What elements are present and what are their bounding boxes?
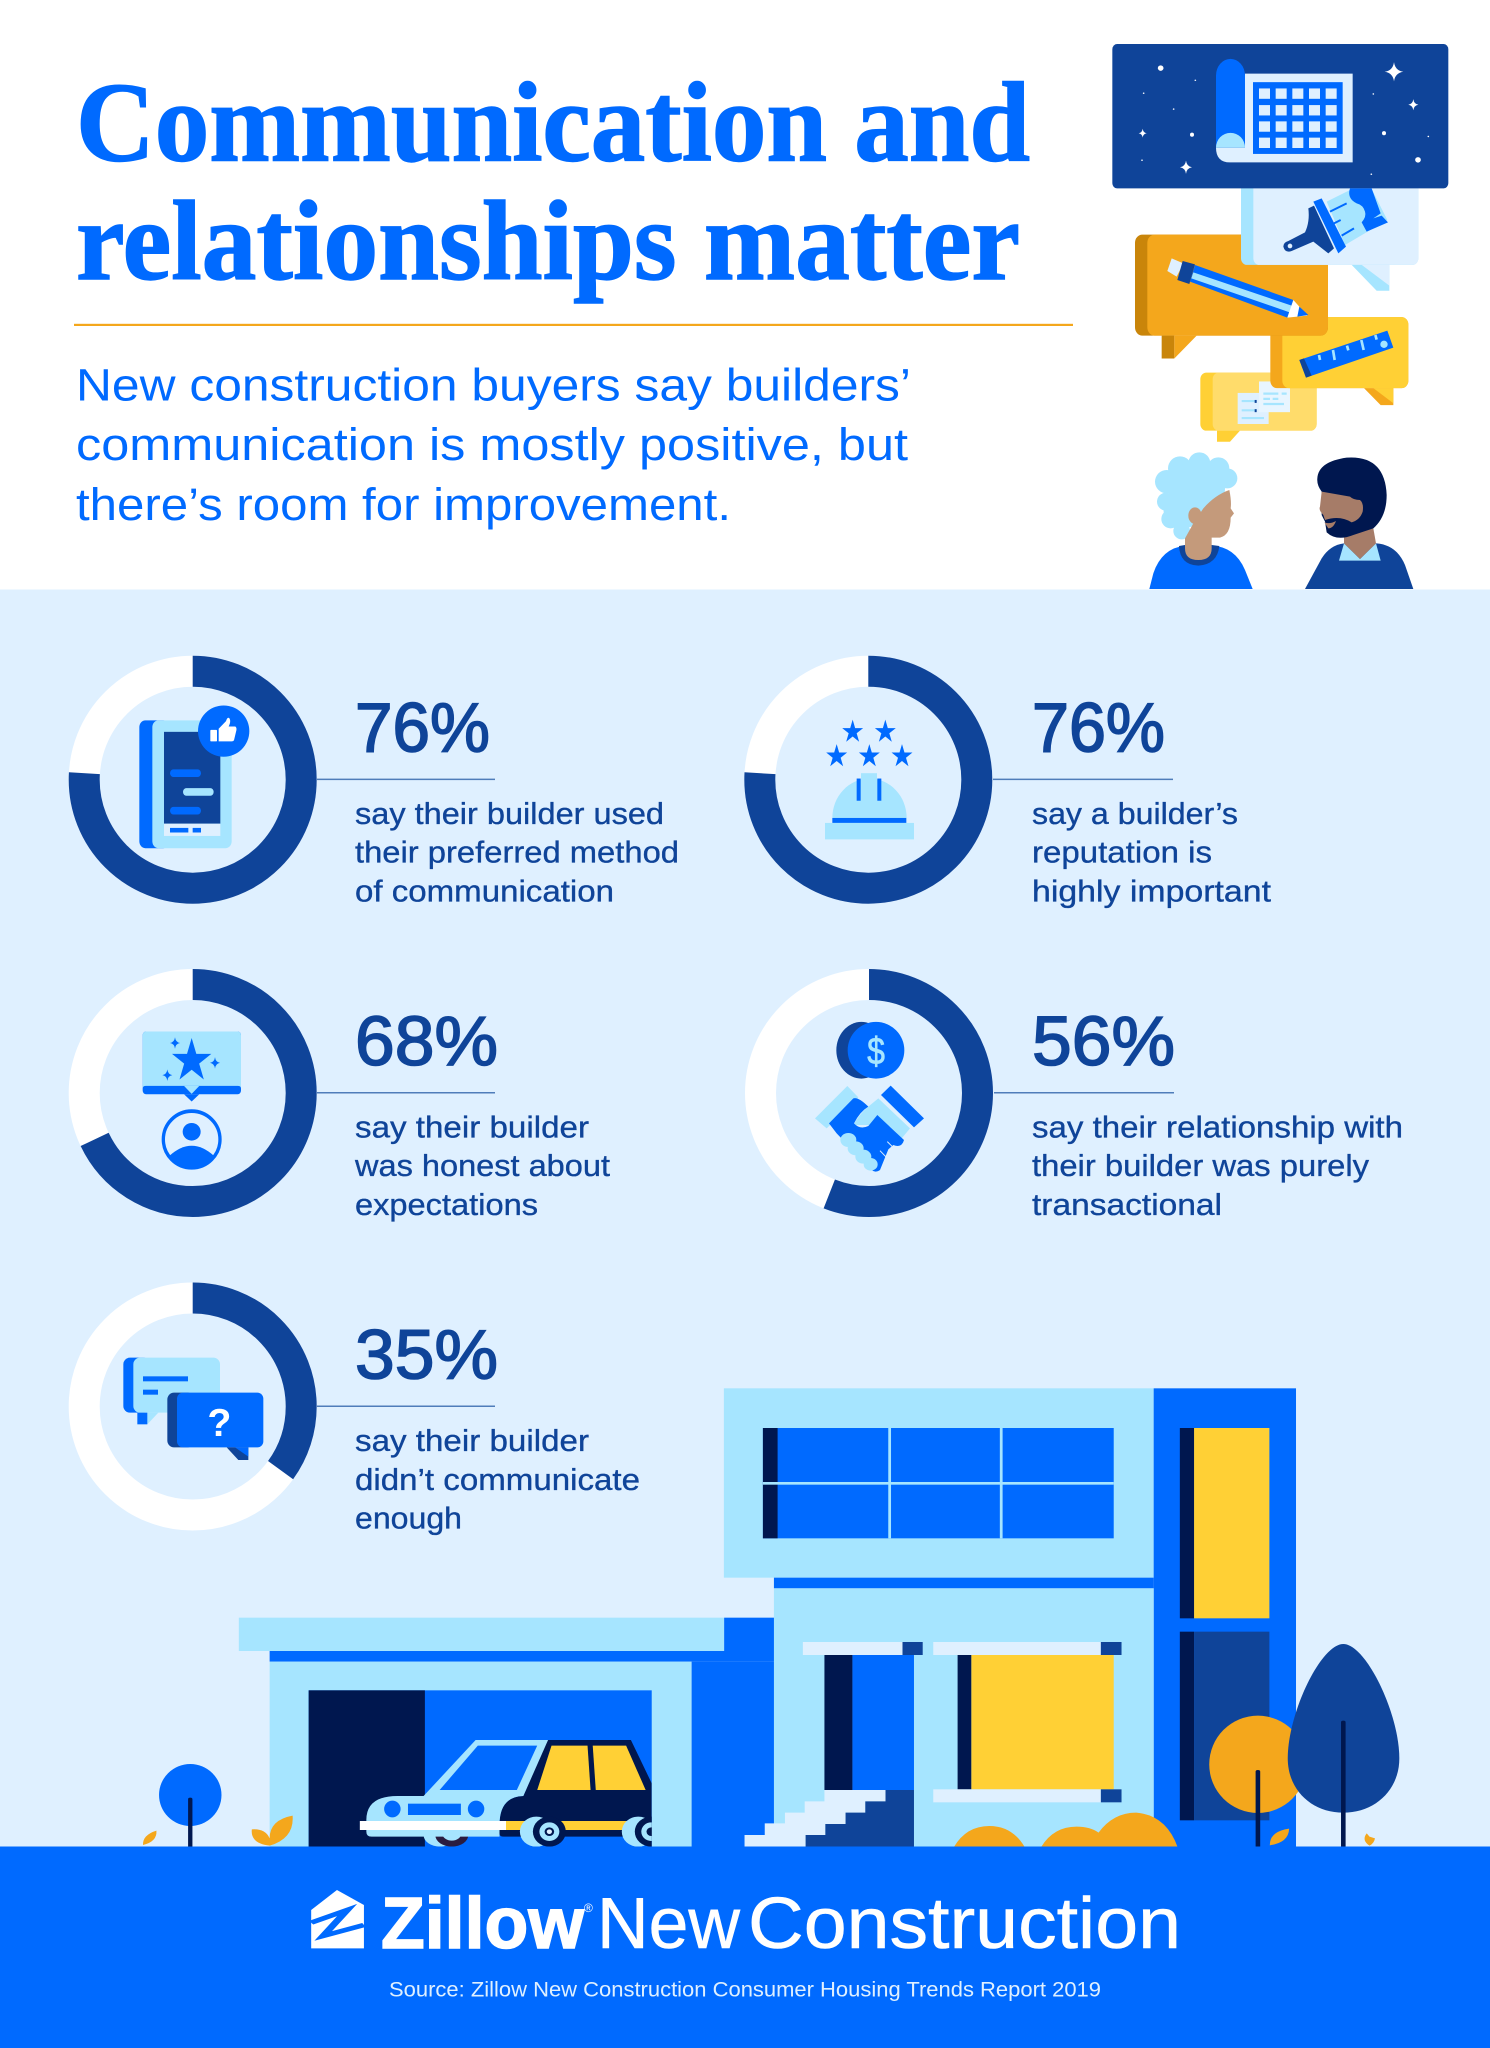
coin	[836, 1022, 904, 1079]
orange bushes	[954, 1813, 1178, 1847]
title: Communication and	[76, 60, 1030, 186]
description	[1032, 796, 1271, 909]
stat: 76% builder reputation	[760, 671, 1271, 909]
garage opening	[309, 1690, 652, 1847]
subtitle: there’s room for improvement.	[76, 479, 731, 530]
stat: 76% preferred communication	[84, 671, 679, 909]
ruler	[1299, 331, 1393, 378]
front light car	[366, 1740, 548, 1847]
donut 35%	[84, 1298, 301, 1515]
donut 56%	[760, 984, 978, 1202]
dark blue tree	[1288, 1644, 1399, 1852]
description: say their builder used	[355, 796, 664, 831]
description: transactional	[1032, 1187, 1222, 1222]
tower dark window	[1180, 1632, 1269, 1820]
title divider	[74, 324, 1073, 326]
rear dark car	[499, 1740, 668, 1847]
description: expectations	[355, 1187, 538, 1222]
orange tree	[1209, 1716, 1307, 1852]
description: say a builder’s	[1032, 796, 1238, 831]
bubble: ruler	[1270, 317, 1408, 405]
description: of communication	[355, 874, 614, 909]
speech bubbles and blueprint	[1112, 44, 1448, 442]
icon: handshake with coin	[815, 1022, 924, 1172]
icon: star review bubble and profile	[143, 1032, 241, 1168]
small blue tree	[159, 1764, 221, 1852]
donut 76%	[84, 671, 301, 888]
coin: $	[867, 1030, 885, 1073]
people	[1149, 452, 1413, 589]
garage with car and small tree	[143, 1618, 774, 1852]
logo word New: New	[597, 1884, 741, 1964]
tower yellow window	[1180, 1428, 1269, 1618]
percentage: 56%	[1032, 1002, 1175, 1080]
leader line	[993, 779, 1173, 780]
house	[724, 1388, 1399, 1852]
garage roof	[239, 1618, 774, 1662]
garage walls	[270, 1662, 774, 1847]
tools: brush, pencil, ruler	[1167, 188, 1393, 378]
description: say their builder	[355, 1423, 589, 1458]
blueprint stars	[1139, 62, 1429, 175]
bubble: notes	[1200, 373, 1317, 442]
description: reputation is	[1032, 835, 1212, 870]
leader line	[317, 1406, 495, 1407]
white bumper	[360, 1821, 506, 1830]
bubble: pencil	[1135, 235, 1328, 359]
light blue background panel	[0, 590, 1490, 1848]
description: was honest about	[354, 1148, 610, 1183]
bubble: paint brush	[1241, 183, 1418, 291]
donut 68%	[84, 984, 301, 1202]
person: woman with curly hair	[1149, 452, 1253, 589]
upper storey	[724, 1388, 1154, 1578]
registered mark: ®	[584, 1901, 593, 1915]
blueprint panel	[1112, 44, 1448, 188]
icon: speech bubbles with question mark	[123, 1358, 263, 1460]
description: say their builder	[355, 1110, 589, 1144]
title	[76, 60, 1030, 304]
description: say their relationship with	[1032, 1110, 1403, 1144]
leader line	[317, 1092, 495, 1094]
lower window	[933, 1642, 1122, 1802]
percentage: 76%	[1032, 689, 1165, 767]
description	[355, 1423, 640, 1536]
description	[355, 796, 679, 909]
logo word Construction: Construction	[748, 1884, 1181, 1964]
person: man with beard	[1305, 457, 1413, 589]
percentage: 35%	[355, 1316, 498, 1394]
footer band	[0, 1846, 1490, 2048]
leader line	[994, 1092, 1174, 1094]
stat: 35% did not communicate enough	[84, 1298, 640, 1536]
logo word Zillow: Zillow	[381, 1884, 585, 1964]
front door	[803, 1642, 923, 1790]
source: Source: Zillow New Construction Consumer Housing Trends Report 2019	[389, 1978, 1101, 2002]
subtitle	[76, 360, 911, 530]
description: didn’t communicate	[355, 1462, 640, 1497]
pencil	[1167, 258, 1308, 318]
percentage: 76%	[355, 689, 490, 767]
upper window	[763, 1428, 1114, 1538]
icon: phone with thumbs up	[139, 705, 249, 848]
subtitle: New construction buyers say builders’	[76, 360, 911, 411]
description: their preferred method	[355, 835, 679, 870]
parked cars	[366, 1740, 668, 1847]
icon: hard hat with stars	[825, 720, 914, 839]
description: highly important	[1032, 874, 1271, 909]
logo: Zillow New Construction	[311, 1884, 1181, 1964]
right tower	[1154, 1388, 1296, 1847]
description	[1032, 1110, 1403, 1222]
stat: 68% honest about expectations	[84, 984, 610, 1222]
leaves	[1270, 1829, 1375, 1846]
leader line	[317, 779, 495, 780]
subtitle: communication is mostly positive, but	[76, 419, 909, 470]
stat: 56% purely transactional	[760, 984, 1403, 1222]
handshake	[815, 1086, 924, 1172]
percentage: 68%	[355, 1002, 498, 1080]
lower storey	[774, 1578, 1154, 1847]
front steps	[745, 1790, 914, 1847]
description: their builder was purely	[1032, 1148, 1370, 1183]
blueprint sheet	[1216, 59, 1353, 162]
icon: speech bubbles with question mark: ?	[207, 1401, 231, 1445]
description	[354, 1110, 610, 1222]
paint brush	[1283, 188, 1388, 253]
donut 76%	[760, 671, 977, 888]
description: enough	[355, 1500, 462, 1536]
title: relationships matter	[76, 179, 1020, 304]
orange leaves	[143, 1816, 293, 1846]
logo mark	[311, 1890, 364, 1948]
illustration: blueprint, speech bubbles and two people	[1112, 44, 1448, 589]
